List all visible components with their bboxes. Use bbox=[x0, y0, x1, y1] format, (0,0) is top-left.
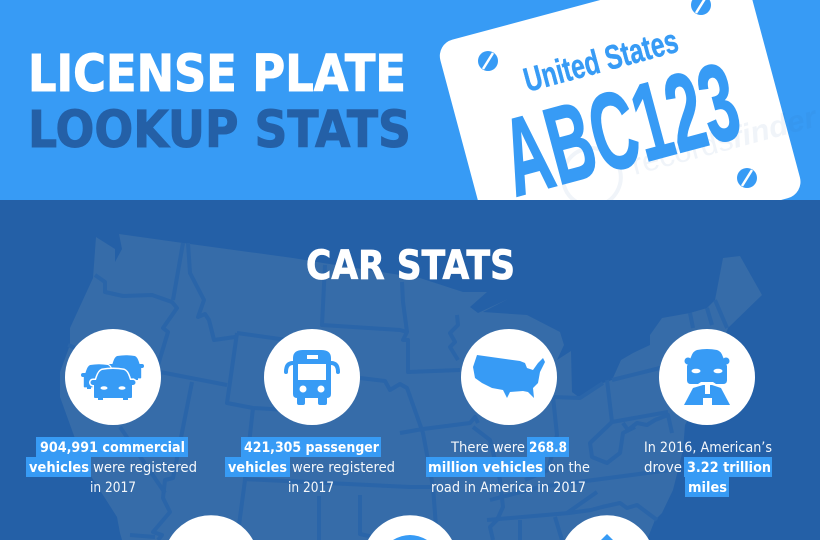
map of the United States bbox=[60, 234, 762, 540]
caption: in 2017 bbox=[288, 480, 334, 496]
stat: commercial vehicles bbox=[26, 329, 197, 496]
caption: 3.22 trillion bbox=[687, 460, 771, 476]
icon: bus bbox=[264, 329, 360, 425]
title: LOOKUP STATS bbox=[28, 101, 411, 160]
license plate illustration: United States bbox=[520, 22, 682, 100]
caption bbox=[644, 440, 772, 497]
caption: 904,991 commercial bbox=[40, 440, 185, 456]
caption: There were bbox=[450, 440, 525, 456]
icon: car on road bbox=[659, 329, 755, 425]
title: LICENSE PLATE bbox=[28, 45, 406, 104]
icon circle: second row centre bbox=[368, 515, 452, 540]
caption: miles bbox=[688, 480, 727, 496]
caption: on the bbox=[548, 460, 590, 476]
license plate illustration: recordsfinder bbox=[628, 100, 820, 182]
caption: vehicles bbox=[29, 460, 89, 476]
caption: in 2017 bbox=[90, 480, 136, 496]
stats panel background bbox=[0, 200, 820, 540]
section heading: CAR STATS bbox=[306, 243, 515, 289]
stat: vehicles on the road bbox=[426, 329, 590, 496]
caption: 268.8 bbox=[529, 440, 567, 456]
caption: road in America in 2017 bbox=[431, 480, 586, 496]
caption: 421,305 passenger bbox=[244, 440, 379, 456]
icon circle: second row left bbox=[169, 515, 253, 540]
icon: map of USA bbox=[461, 329, 557, 425]
caption bbox=[26, 437, 197, 496]
stat: passenger vehicles bbox=[225, 329, 395, 496]
stat: miles driven bbox=[644, 329, 772, 497]
caption bbox=[426, 437, 590, 496]
title bbox=[28, 45, 411, 160]
caption: were registered bbox=[292, 460, 395, 476]
icon: three cars bbox=[65, 329, 161, 425]
caption: drove bbox=[644, 460, 682, 476]
caption: In 2016, American’s bbox=[644, 440, 772, 456]
caption: million vehicles bbox=[428, 460, 543, 476]
caption bbox=[225, 437, 395, 496]
icon circle: second row right bbox=[565, 515, 649, 540]
caption: vehicles bbox=[228, 460, 287, 476]
header band bbox=[0, 0, 820, 200]
caption: were registered bbox=[93, 460, 197, 476]
